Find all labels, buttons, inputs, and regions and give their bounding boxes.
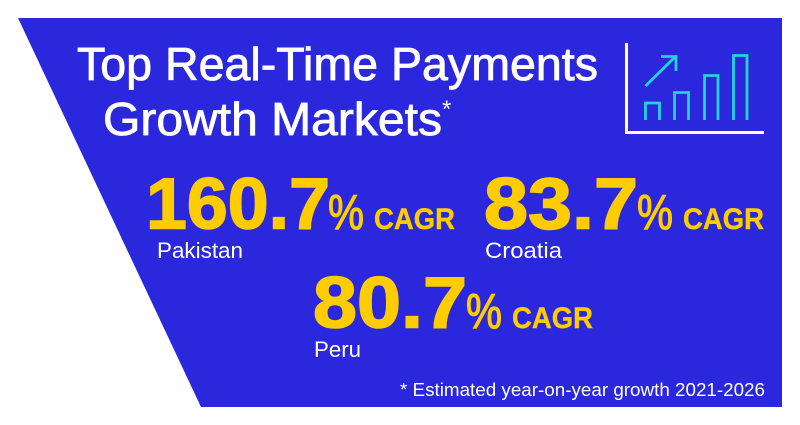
- stat: Pakistan: 160.7: [146, 164, 330, 244]
- stat: Croatia: CAGR: [683, 203, 764, 236]
- title: Top Real-Time Payments: [77, 38, 598, 90]
- stat: Pakistan: CAGR: [374, 203, 455, 236]
- title: Growth Markets: [103, 93, 442, 145]
- stat: Peru: CAGR: [512, 302, 593, 335]
- stat: Croatia: [484, 164, 764, 263]
- stat: Pakistan: [146, 164, 455, 263]
- stat: Croatia: %: [637, 186, 673, 240]
- stat: Peru: %: [466, 285, 502, 339]
- stat: Croatia: Croatia: [485, 238, 563, 263]
- title: [77, 38, 598, 145]
- stat: Pakistan: Pakistan: [157, 238, 243, 263]
- stat: Pakistan: %: [328, 186, 364, 240]
- stat: Peru: [313, 264, 593, 362]
- footnote: * Estimated year-on-year growth 2021-2026: [400, 380, 765, 400]
- stat: Peru: 80.7: [313, 264, 467, 344]
- title: *: [442, 96, 451, 123]
- stat: Peru: Peru: [314, 337, 361, 362]
- icon: growth chart: [626, 43, 764, 132]
- stat: Croatia: 83.7: [484, 164, 638, 244]
